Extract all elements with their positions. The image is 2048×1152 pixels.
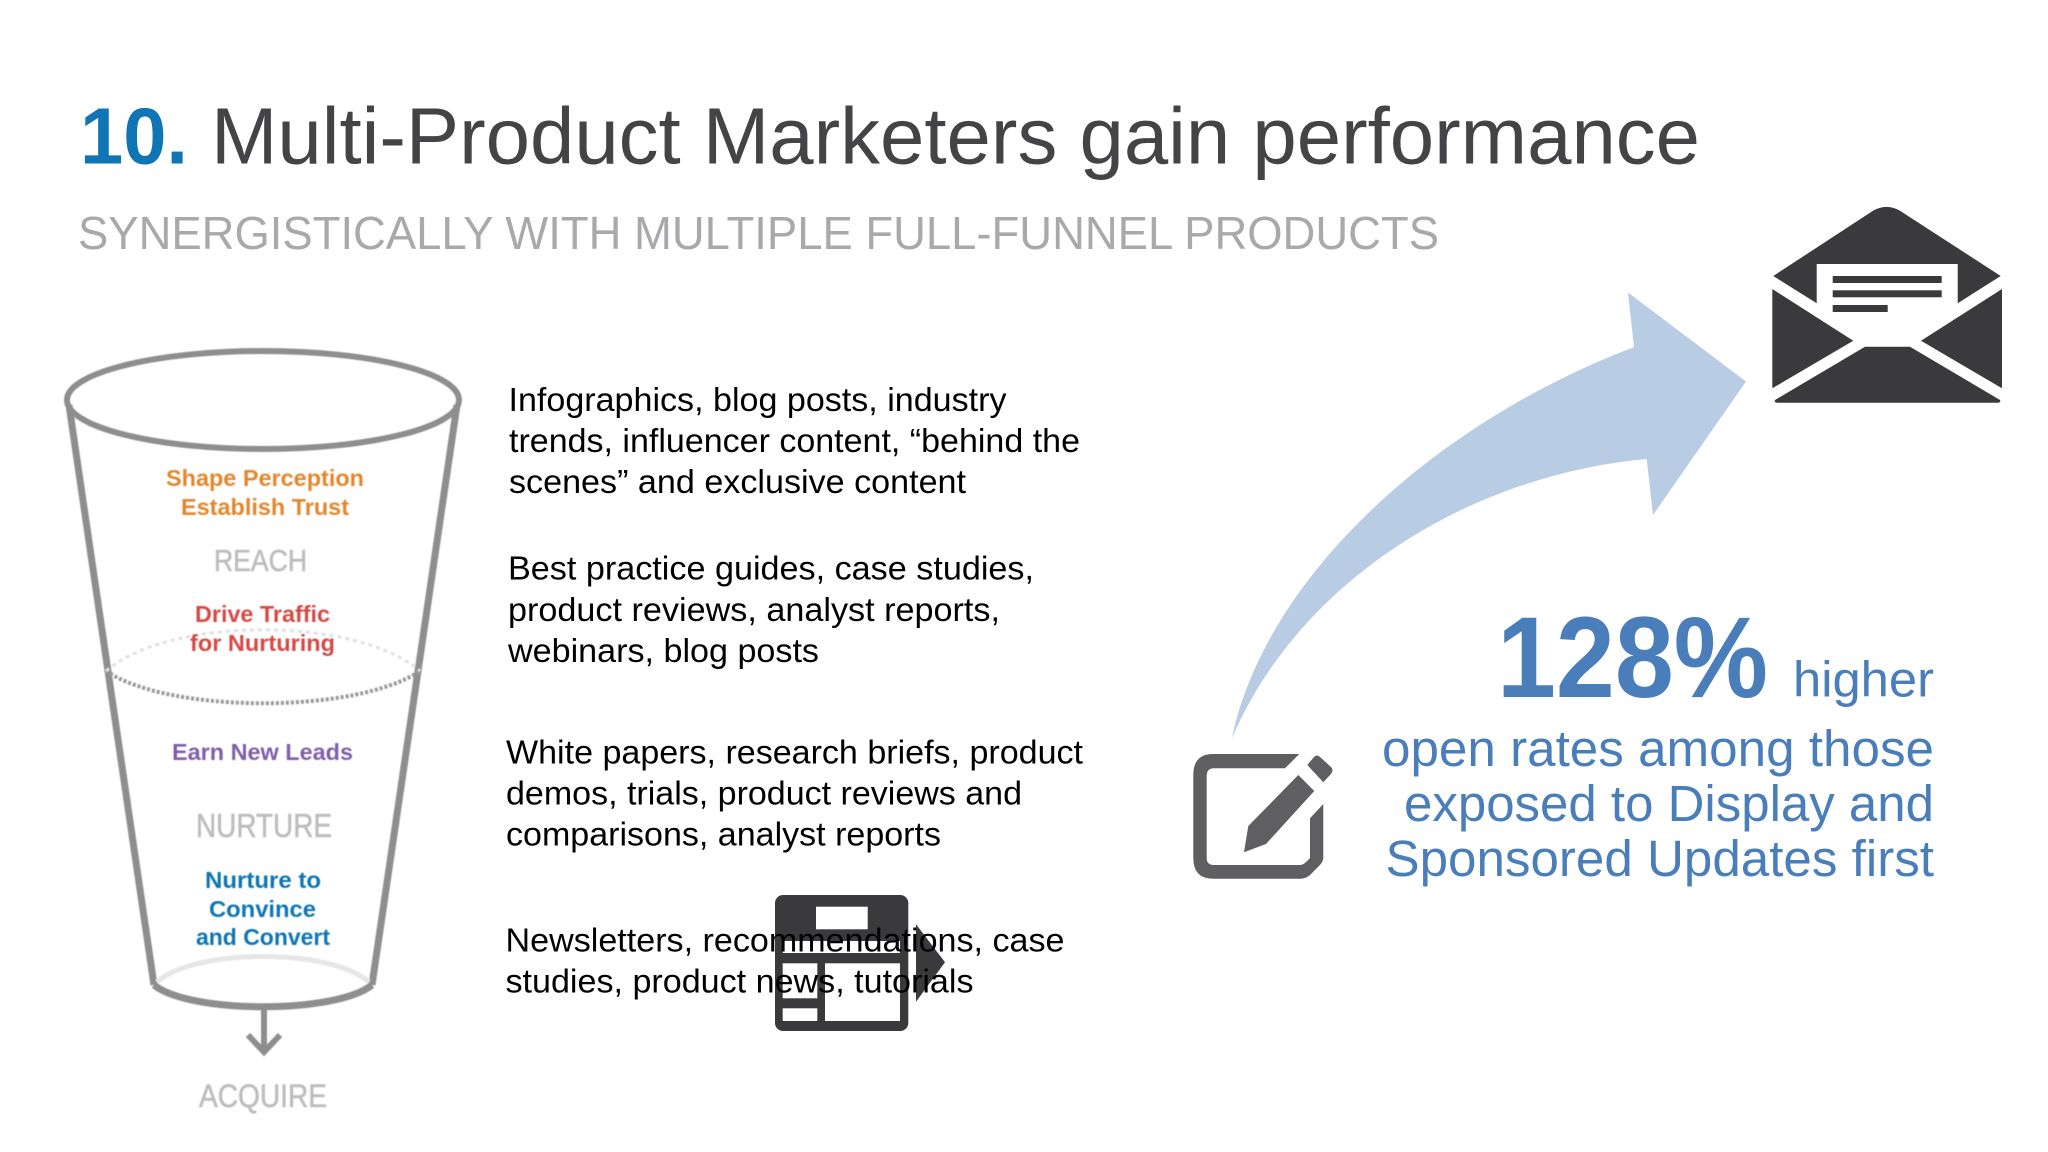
funnel labels: Establish Trust xyxy=(181,494,349,520)
funnel labels: for Nurturing xyxy=(190,630,335,656)
text: traffic content: webinars, blog posts xyxy=(507,633,819,670)
text: reach content: Infographics, blog posts, industry xyxy=(508,382,1007,419)
icon: open envelope xyxy=(1772,207,2002,403)
funnel exit arrow xyxy=(248,1008,280,1052)
funnel labels: Shape Perception xyxy=(166,465,364,491)
funnel labels: Convince xyxy=(209,896,316,922)
text: lead content xyxy=(506,734,1084,854)
icon: newspaper with arrow xyxy=(775,895,945,1031)
funnel labels: REACH xyxy=(214,543,307,578)
stat: 128% higher: 128% xyxy=(1497,594,1768,722)
stat description: open rates among those xyxy=(1382,720,1934,777)
text: traffic content: Best practice guides, case studies, xyxy=(508,550,1034,588)
text: reach content: scenes” and exclusive content xyxy=(509,464,967,501)
funnel labels: Drive Traffic xyxy=(195,601,330,627)
funnel diagram xyxy=(67,351,459,1114)
subtitle: SYNERGISTICALLY WITH MULTIPLE FULL-FUNNEL PRODUCTS xyxy=(78,207,1439,259)
stat description xyxy=(1382,720,1934,887)
text: lead content: White papers, research briefs, product xyxy=(506,734,1084,772)
stat: 128% higher: higher xyxy=(1793,652,1934,708)
text: nurture content: Newsletters, recommendations, case xyxy=(506,922,1064,960)
funnel labels xyxy=(166,465,364,1114)
title: 10. xyxy=(80,92,188,180)
text: nurture content xyxy=(506,922,1064,1000)
icon: pencil and notepad xyxy=(1193,754,1332,879)
funnel labels: ACQUIRE xyxy=(199,1078,327,1114)
funnel labels: Nurture to xyxy=(205,867,321,893)
stat description: Sponsored Updates first xyxy=(1386,830,1934,887)
funnel labels: and Convert xyxy=(196,924,330,950)
title: Multi-Product Marketers gain performance xyxy=(211,92,1700,180)
funnel labels: Earn New Leads xyxy=(172,739,353,765)
text: reach content: trends, influencer content, “behind the xyxy=(509,423,1080,460)
stat description: exposed to Display and xyxy=(1404,775,1934,832)
text: traffic content xyxy=(507,550,1034,670)
text: lead content: demos, trials, product reviews and xyxy=(506,776,1022,812)
text: lead content: comparisons, analyst reports xyxy=(506,816,941,854)
arrow: curved blue arrow xyxy=(1232,292,1746,738)
text: nurture content: studies, product news, tutorials xyxy=(506,964,974,1000)
stat: 128% higher xyxy=(1497,594,1934,722)
text: traffic content: product reviews, analyst reports, xyxy=(508,592,1000,629)
text: reach content xyxy=(508,382,1080,501)
funnel outline xyxy=(67,351,459,1007)
funnel labels: NURTURE xyxy=(196,807,332,844)
